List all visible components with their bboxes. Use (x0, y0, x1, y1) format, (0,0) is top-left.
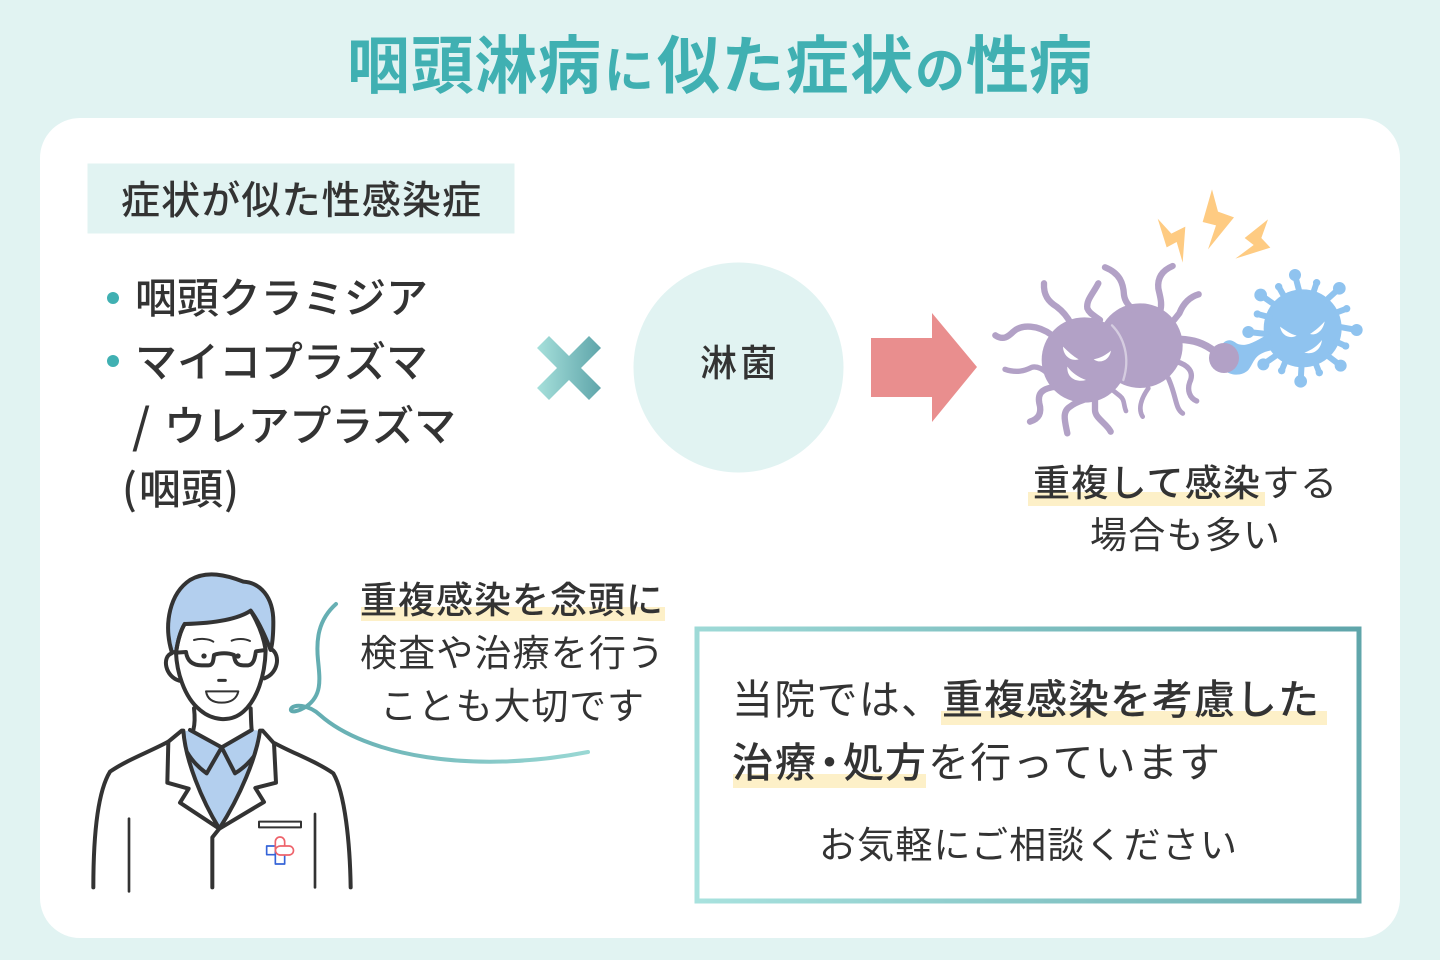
list: similar infections: / (132, 388, 150, 457)
text: overlap infection note: 場合も多い (1090, 505, 1280, 559)
coat (93, 742, 351, 887)
illustration: bacteria and virus (995, 189, 1363, 433)
heading: similar STIs: 症状が似た性感染症 (121, 170, 481, 226)
title: 性病 (966, 16, 1092, 107)
title: に (604, 31, 654, 103)
panel: clinic message box: お気軽にご相談ください (819, 815, 1237, 869)
lapels (167, 731, 276, 829)
circle: gonococcus: 淋菌 (700, 333, 777, 387)
title: の (915, 31, 965, 103)
title (347, 16, 1092, 107)
glasses (177, 650, 265, 665)
arrow (871, 313, 977, 422)
illustration: doctor (93, 574, 351, 891)
panel: clinic message box: 当院では、 (732, 666, 942, 726)
text: doctor's speech: 重複感染を念頭に (360, 570, 663, 624)
icon: lightning bolts (1158, 189, 1270, 263)
panel: clinic message box: 重複感染を考慮した (942, 666, 1319, 726)
text: overlap infection note (1028, 453, 1337, 559)
text: overlap infection note: 重複して感染 (1033, 453, 1260, 507)
list: similar infections: ) (224, 456, 239, 517)
list: similar infections: ウレアプラズマ (164, 393, 456, 454)
list: similar infections (107, 265, 456, 517)
text: doctor's speech: ことも大切です (380, 676, 644, 730)
list: similar infections: 咽頭 (139, 456, 223, 517)
icon: virus (1220, 269, 1363, 388)
icon: medical cross badge (267, 837, 293, 864)
icon: multiply cross (537, 336, 601, 400)
text: doctor's speech (360, 570, 665, 730)
text: overlap infection note: する (1262, 453, 1337, 507)
panel: clinic message box: 治療 (732, 729, 816, 789)
panel: clinic message box: 処方 (843, 729, 926, 789)
title: 似た症状 (657, 16, 913, 107)
hair (168, 574, 273, 653)
panel: clinic message box: を行っています (928, 729, 1220, 789)
heading: similar STIs (88, 164, 514, 234)
speech curve (291, 604, 588, 762)
list: similar infections: 咽頭クラミジア (135, 265, 428, 326)
list: similar infections: マイコプラズマ (135, 329, 428, 390)
neck (193, 708, 252, 730)
list: similar infections: ( (122, 456, 137, 517)
face (176, 611, 266, 719)
circle: gonococcus (634, 262, 844, 472)
icon: bacteria (995, 266, 1239, 433)
panel: clinic message box (697, 629, 1359, 901)
shirt and collar (184, 730, 260, 827)
title: 咽頭淋病 (347, 16, 601, 107)
panel: clinic message box: ・ (809, 729, 850, 789)
text: doctor's speech: 検査や治療を行う (360, 623, 664, 677)
